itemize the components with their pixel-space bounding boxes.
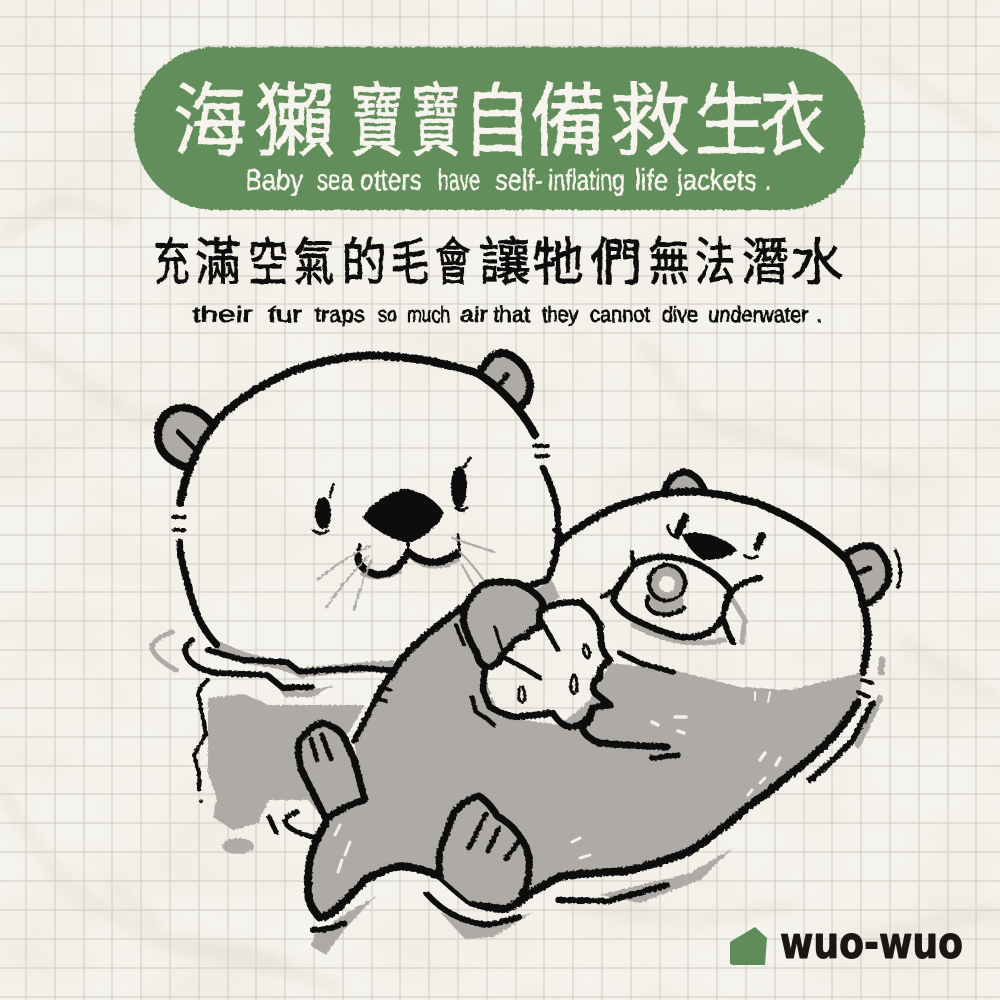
- subheading: 滿: [195, 221, 241, 295]
- hind foot: [298, 723, 365, 819]
- pup drops: [518, 645, 590, 702]
- english title: Baby: [245, 164, 303, 197]
- subheading: 充: [154, 221, 190, 295]
- logo house icon: [730, 927, 767, 965]
- english subheading: their: [192, 302, 253, 327]
- baby ears: [665, 474, 702, 490]
- subheading: 會: [435, 221, 471, 295]
- title banner: [134, 47, 865, 210]
- big otter mouth: [362, 556, 458, 578]
- baby face: [678, 517, 762, 547]
- english subheading: cannot: [590, 302, 650, 327]
- big otter: [158, 353, 667, 930]
- subheading: 潛: [742, 222, 788, 296]
- english subheading: so: [378, 302, 397, 327]
- english title: have: [438, 164, 480, 197]
- body fill: [308, 607, 863, 917]
- english subheading: traps: [315, 302, 365, 327]
- banner pill: [134, 47, 865, 210]
- english title: otters: [360, 164, 422, 197]
- english subheading: much: [407, 302, 450, 327]
- big otter head outline: [180, 356, 535, 503]
- subheading: 水: [790, 221, 844, 296]
- main title: 備: [530, 57, 606, 173]
- english title: sea: [317, 164, 353, 197]
- main title: 生: [694, 57, 768, 173]
- english subheading: they: [542, 302, 578, 327]
- big otter ears: [158, 408, 212, 465]
- english title: inflating: [548, 164, 625, 197]
- main title: [173, 56, 826, 173]
- upper paw outline: [463, 582, 543, 667]
- main title: 寶: [411, 58, 461, 173]
- subheading: 毛: [391, 221, 429, 295]
- subheading: 讓: [479, 221, 531, 295]
- subheading: 無: [649, 221, 689, 295]
- english subheading: underwater: [708, 302, 808, 327]
- big otter nose: [362, 489, 444, 542]
- subheading: 們: [590, 221, 642, 295]
- lower foot: [440, 796, 529, 905]
- baby otter toy nipple: [647, 565, 685, 615]
- main title: 救: [610, 57, 690, 173]
- baby otter lines: [298, 472, 900, 917]
- water shadow: [152, 580, 882, 955]
- baby otter body: [299, 583, 863, 917]
- main title: 海: [173, 57, 247, 173]
- main title: 自: [463, 57, 531, 173]
- english subheading: air: [460, 302, 488, 327]
- subheading: 法: [695, 222, 735, 296]
- upper paw fill: [463, 583, 543, 667]
- english subheading: dive: [662, 302, 698, 327]
- english subheading: that: [493, 302, 530, 327]
- english title: .: [764, 164, 772, 197]
- subheading: 氣: [294, 221, 334, 295]
- hind foot fill: [299, 723, 365, 819]
- right paw: [582, 660, 667, 747]
- baby sea otter pup: [543, 602, 610, 660]
- subheading: 牠: [532, 221, 584, 295]
- highlights: [335, 692, 780, 872]
- main title: 獺: [255, 57, 335, 173]
- english subheading: .: [816, 302, 822, 327]
- subheading: [154, 221, 844, 296]
- big otter whiskers: [318, 538, 494, 610]
- big otter eyes: [315, 497, 331, 529]
- main title: 衣: [760, 58, 826, 173]
- subheading: 空: [248, 222, 288, 296]
- english title: life: [635, 164, 668, 197]
- logo wordmark: wuo-wuo: [780, 918, 963, 969]
- english subheading: fur: [268, 302, 302, 327]
- baby back: [374, 607, 463, 703]
- logo: [730, 918, 963, 969]
- english title: self-: [495, 164, 543, 197]
- eye patch: [607, 570, 745, 643]
- english title: jackets: [676, 164, 757, 197]
- water lines: [208, 650, 393, 672]
- baby head outline: [565, 492, 868, 672]
- main title: 寶: [350, 56, 404, 172]
- subheading: 的: [342, 221, 386, 295]
